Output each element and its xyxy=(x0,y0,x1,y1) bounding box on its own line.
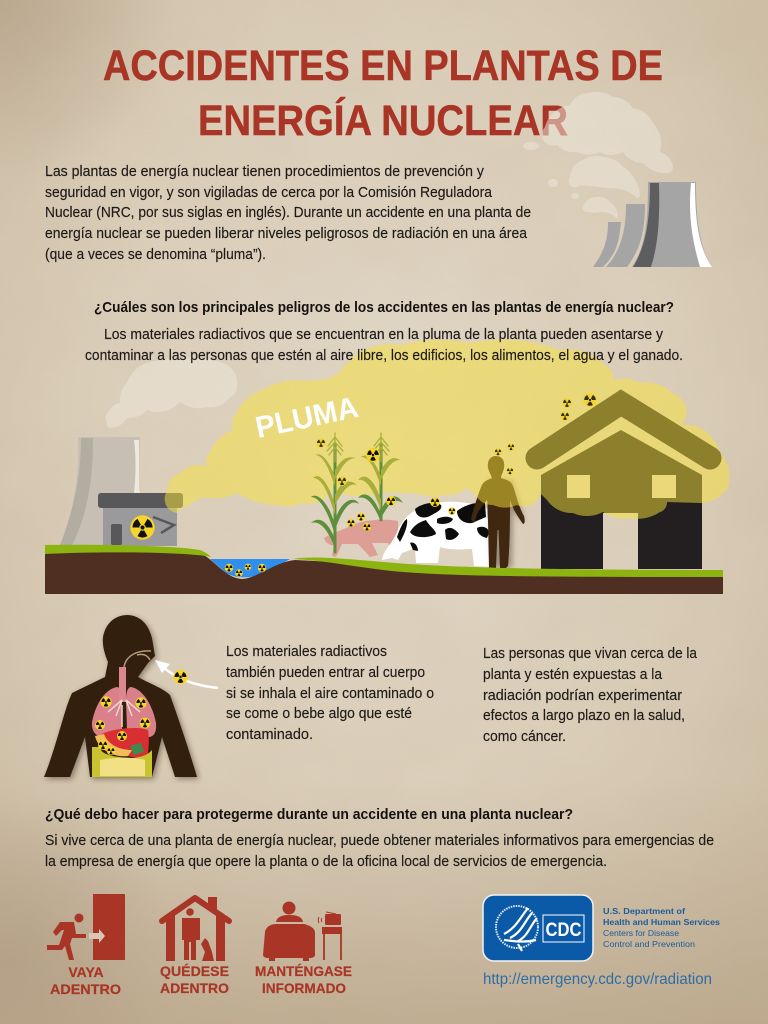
text block: introduction: Nuclear (NRC, por sus siglas en inglés). Durante un accidente en una planta de xyxy=(45,204,531,221)
text block: entry into the body: también pueden entrar al cuerpo xyxy=(226,664,425,681)
text block: agency names: U.S. Department of xyxy=(603,906,685,916)
illustration: plume scene xyxy=(45,340,729,594)
radioactive plume xyxy=(165,340,729,519)
corn plants xyxy=(311,433,403,552)
title: ENERGÍA NUCLEAR xyxy=(198,97,568,145)
link text: website: http://emergency.cdc.gov/radiation xyxy=(483,971,712,988)
text block: introduction xyxy=(45,163,531,263)
icon: stay inside: ADENTRO xyxy=(160,980,229,996)
icon: go inside xyxy=(47,894,125,997)
text block: protection description: Si vive cerca de una planta de energía nuclear, puede obtener materiales informativos para emergencias de xyxy=(45,832,714,849)
power plant xyxy=(60,437,183,546)
text block: long-term effects: como cáncer. xyxy=(483,728,566,745)
lungs xyxy=(92,667,156,737)
text block: long-term effects: planta y estén expuestas a la xyxy=(483,666,663,683)
text block: introduction: seguridad en vigor, y son vigiladas de cerca por la Comisión Reguladora xyxy=(45,184,493,201)
text block: agency names: Health and Human Services xyxy=(603,917,720,927)
text block: long-term effects: efectos a largo plazo en la salud, xyxy=(483,707,685,724)
arrow: inhaled particle xyxy=(155,660,218,688)
person silhouette xyxy=(471,456,525,568)
digestive organs xyxy=(92,728,152,777)
text block: agency names xyxy=(603,906,720,949)
text block: entry into the body: se come o bebe algo que esté xyxy=(226,705,412,722)
text block: introduction: Las plantas de energía nuclear tienen procedimientos de prevención y xyxy=(45,163,484,180)
icon: go inside: ADENTRO xyxy=(50,981,121,997)
text block: long-term effects: radiación podrían experimentar xyxy=(483,687,682,704)
text block: protection description xyxy=(45,832,714,870)
icon: stay informed: INFORMADO xyxy=(262,980,346,996)
text block: dangers description xyxy=(85,326,683,364)
heading: main dangers: ¿Cuáles son los principales peligros de los accidentes en las plantas de energía nuclear? xyxy=(94,299,674,316)
text block: entry into the body: contaminado. xyxy=(226,726,313,743)
heading: protection: ¿Qué debo hacer para protegerme durante un accidente en una planta nuclear? xyxy=(45,806,573,823)
house xyxy=(537,403,710,569)
illustration: human body xyxy=(44,615,218,779)
icon: stay inside xyxy=(160,897,229,996)
icon: go inside: VAYA xyxy=(68,964,104,980)
cow xyxy=(382,502,490,567)
label: PLUMA: PLUMA xyxy=(253,391,361,445)
text block: protection description: la empresa de energía que opere la planta o de la oficina local de servicios de emergencia. xyxy=(45,853,607,870)
ground and river xyxy=(45,545,723,594)
text block: agency names: Centers for Disease xyxy=(603,928,679,938)
text block: agency names: Control and Prevention xyxy=(603,939,695,949)
title: ACCIDENTES EN PLANTAS DE xyxy=(103,42,663,90)
icon: stay informed: MANTÉNGASE xyxy=(255,963,352,979)
steam cloud near plant xyxy=(106,358,237,428)
radiation particles in body xyxy=(95,696,151,755)
text block: dangers description: contaminar a las personas que estén al aire libre, los edificios, los alimentos, el agua y el ganado. xyxy=(85,347,683,364)
text block: introduction: energía nuclear se pueden liberar niveles peligrosos de radiación en una área xyxy=(45,225,528,242)
text block: entry into the body: si se inhala el aire contaminado o xyxy=(226,685,434,702)
radiation particles xyxy=(225,393,597,577)
text block: entry into the body: Los materiales radiactivos xyxy=(226,643,387,660)
text block: entry into the body xyxy=(226,643,434,743)
title xyxy=(103,42,663,145)
logo: CDC xyxy=(483,895,593,961)
text block: long-term effects xyxy=(483,645,698,745)
text block: dangers description: Los materiales radiactivos que se encuentran en la pluma de la planta pueden asentarse y xyxy=(104,326,663,343)
icon: top cooling towers with steam xyxy=(523,92,712,267)
text block: introduction: (que a veces se denomina “pluma”). xyxy=(45,246,266,263)
logo: CDC: CDC xyxy=(546,920,582,941)
pig xyxy=(324,520,398,557)
airway xyxy=(124,651,151,667)
icon: stay inside: QUÉDESE xyxy=(160,963,229,979)
text block: long-term effects: Las personas que vivan cerca de la xyxy=(483,645,698,662)
icon: stay informed xyxy=(255,902,352,996)
